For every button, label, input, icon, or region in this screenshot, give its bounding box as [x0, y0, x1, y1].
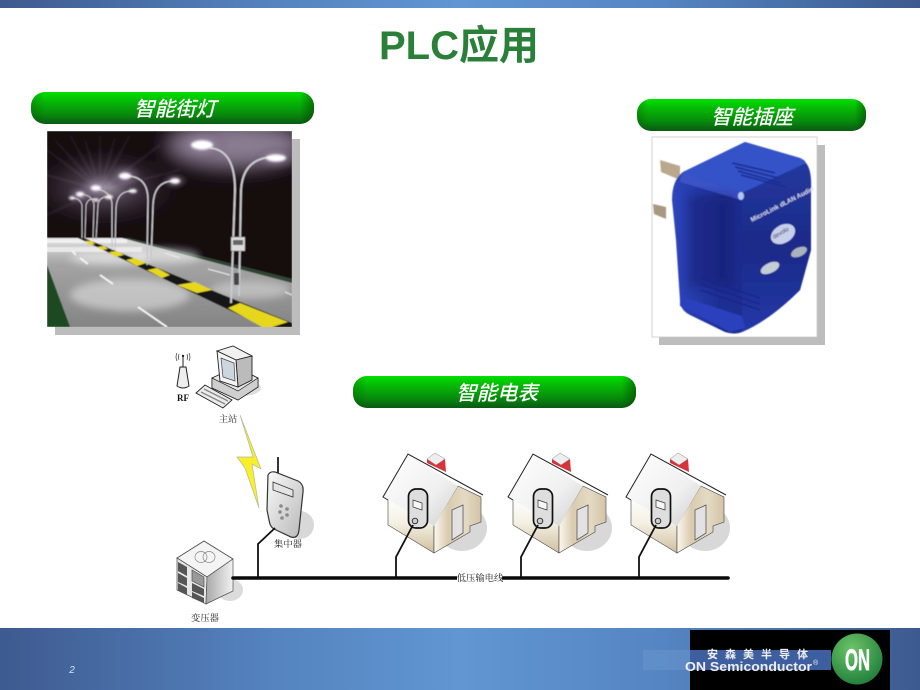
house 3 with meter: [626, 453, 730, 578]
top header bar: [0, 0, 920, 8]
caption: low voltage line: 低压输电线: [457, 572, 504, 584]
pill heading: smart meter: 智能电表: [456, 382, 540, 405]
pill heading: smart socket: [637, 99, 866, 131]
icon: lightning bolt: [237, 415, 261, 508]
logo: ON Semiconductor: ®: [813, 659, 819, 667]
pill heading: smart socket: 智能插座: [711, 106, 796, 129]
icon: RF antenna: [176, 353, 190, 403]
pill heading: smart meter: [353, 376, 636, 408]
page number: 2: [68, 665, 75, 676]
title: PLC应用: [379, 24, 539, 68]
icon: RF antenna: RF: [177, 393, 189, 403]
photo: street lamps at night: [47, 131, 300, 335]
low voltage power line: [233, 576, 728, 580]
house 2 with meter: [508, 453, 612, 578]
house 1 with meter: [383, 453, 487, 578]
logo: ON Semiconductor: 安森美半导体: [707, 647, 815, 661]
icon: concentrator device: [258, 457, 314, 578]
logo: ON Semiconductor: [643, 630, 890, 690]
icon: master station computer: [196, 346, 261, 408]
caption: concentrator: 集中器: [274, 538, 303, 550]
logo: ON Semiconductor: ON: [845, 644, 870, 677]
caption: transformer: 变压器: [191, 612, 220, 624]
photo: smart socket plug: [652, 137, 825, 345]
footer bar: [0, 628, 920, 690]
pill heading: smart street lamp: 智能街灯: [134, 98, 219, 121]
icon: transformer cube: [177, 541, 243, 604]
photo: smart socket plug: devolo: [772, 226, 791, 241]
pill heading: smart street lamp: [31, 92, 314, 124]
photo: smart socket plug: MicroLink dLAN Audio: [750, 186, 815, 224]
caption: master station: 主站: [219, 413, 237, 425]
logo: ON Semiconductor: ON Semiconductor: [685, 659, 812, 674]
